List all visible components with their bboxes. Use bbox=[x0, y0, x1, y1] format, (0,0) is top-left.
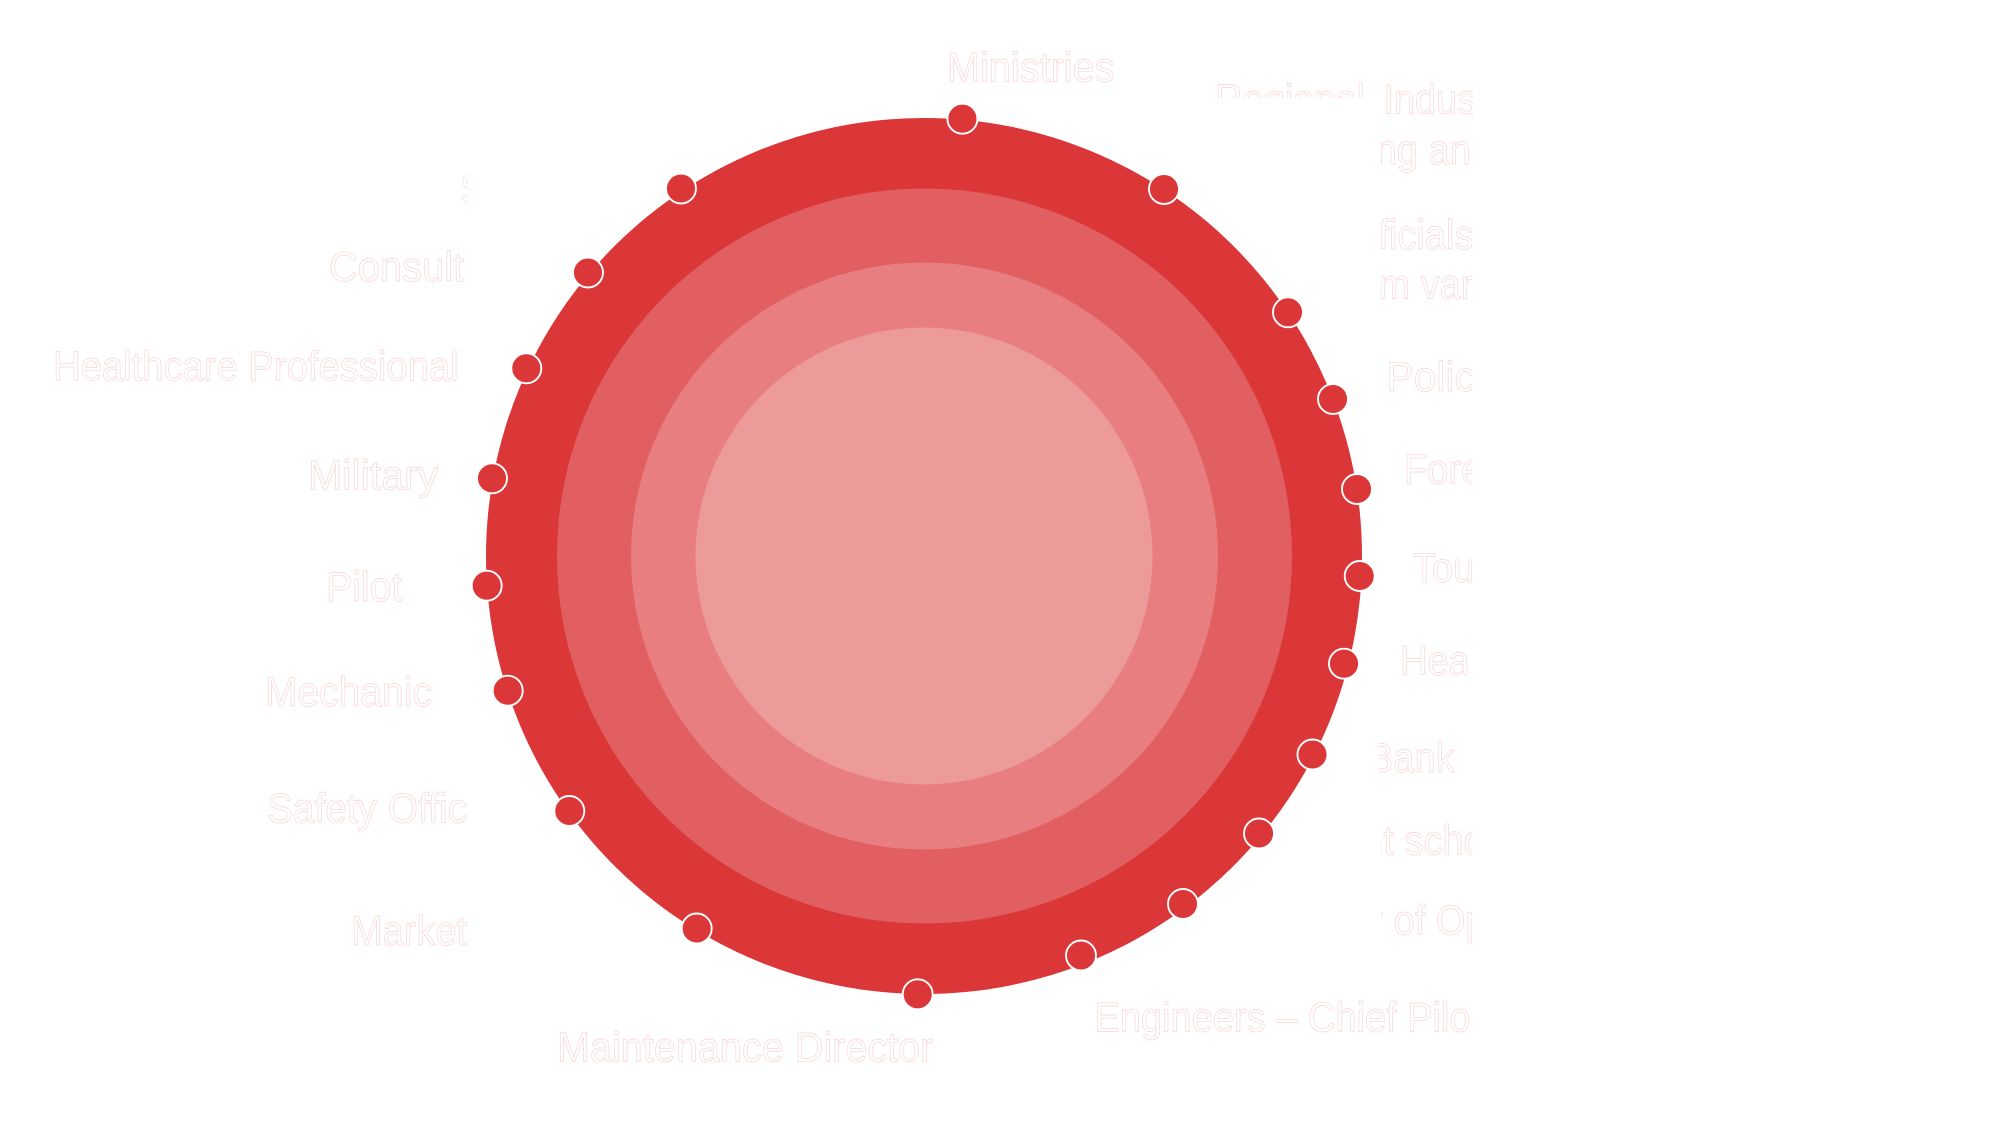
label: Healthcare Professional: Healthcare Professional bbox=[53, 343, 459, 390]
ring: third bbox=[631, 262, 1218, 850]
label: Regional Industry bbox=[1218, 82, 1473, 114]
label: clipped S fragment: Sales bbox=[460, 166, 555, 212]
label: Bank: Bank bbox=[1368, 735, 1456, 781]
ring: outer bbox=[486, 118, 1362, 994]
marker dots around ring bbox=[472, 104, 1375, 1009]
diagram: stakeholder concentric circle bbox=[56, 50, 1473, 1062]
label: Market: Marketing bbox=[351, 908, 518, 954]
label: Safety Officer: Safety Officer bbox=[267, 784, 502, 832]
label: Flight school: Flight school bbox=[1301, 818, 1514, 864]
label: Maintenance Director: Maintenance Director bbox=[557, 1023, 933, 1071]
concentric rings bbox=[486, 118, 1362, 994]
label: Military: Military bbox=[308, 451, 439, 499]
label: Officials: Officials bbox=[1339, 212, 1473, 258]
label: Training and: Training and bbox=[1282, 127, 1492, 173]
ring: inner core bbox=[696, 328, 1152, 784]
label: Ministries: Ministries bbox=[947, 44, 1115, 91]
label: Health: Health bbox=[1400, 638, 1510, 684]
label: from various: from various bbox=[1334, 262, 1543, 308]
label: Director of Operations: Director of Operations bbox=[1250, 898, 1622, 944]
label: Foreign: Foreign bbox=[1404, 447, 1533, 493]
label: Mechanic: Mechanic bbox=[265, 668, 432, 715]
label: Regional Industry: Industry bbox=[1383, 77, 1519, 123]
label: Regional Industry: Regional bbox=[1215, 77, 1365, 123]
ring: second bbox=[557, 188, 1292, 924]
label: Pilot: Pilot bbox=[326, 563, 402, 610]
label: Policy: Policy makers bbox=[1386, 353, 1640, 400]
label: Engineers – Chief Pilots: Engineers – Chief Pilots bbox=[1094, 995, 1500, 1041]
label: Consultant: Consultant bbox=[329, 243, 520, 290]
label: Tourism: Tourism bbox=[1413, 545, 1546, 591]
